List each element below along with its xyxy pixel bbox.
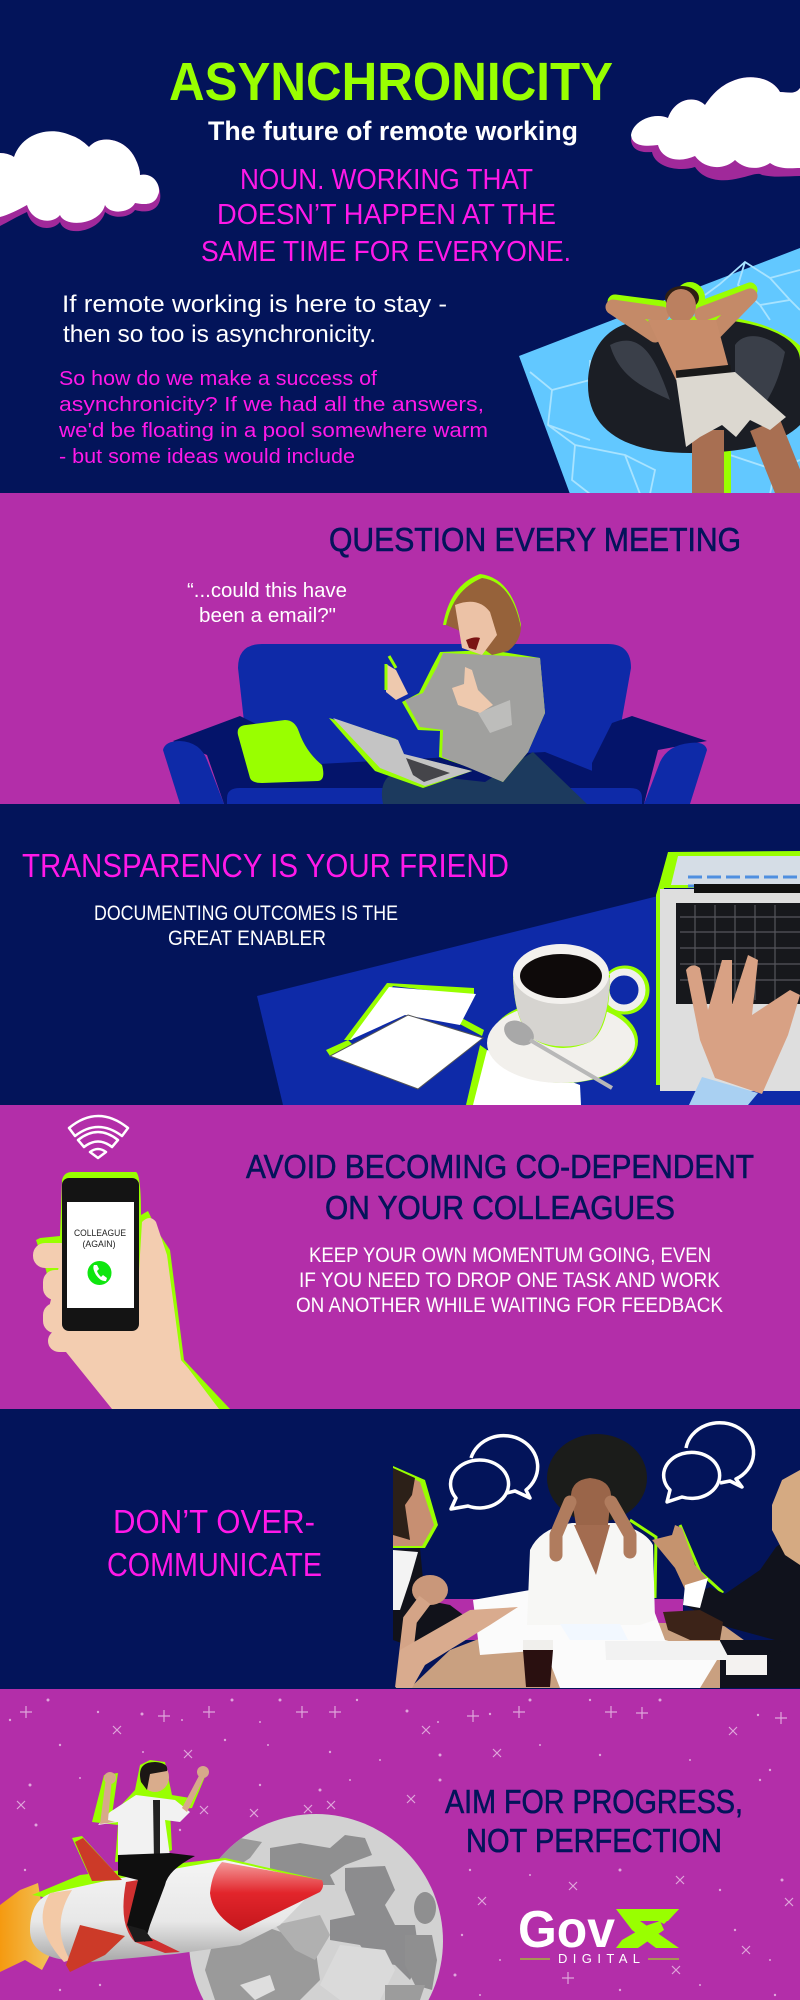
green outline <box>36 1172 230 1409</box>
legs <box>708 425 795 500</box>
panel: transparency <box>0 804 800 1105</box>
table <box>412 1623 744 1688</box>
phone <box>62 1178 139 1331</box>
intro statement: If remote working is here to stay - <box>62 291 447 318</box>
icon: loose papers <box>326 983 581 1105</box>
photo: meeting <box>393 1434 800 1688</box>
man left <box>393 1466 518 1688</box>
torso <box>648 320 730 380</box>
heading: AIM FOR PROGRESS, <box>445 1783 743 1820</box>
quote: “...could this have <box>187 580 347 602</box>
title: ASYNCHRONICITY <box>169 52 613 112</box>
definition text <box>201 164 571 268</box>
laptop <box>329 718 472 788</box>
shirt cuff <box>689 1077 758 1105</box>
heading <box>107 1503 322 1583</box>
panel: avoid becoming co-dependent <box>0 1105 800 1409</box>
rocket green edge <box>32 1858 322 1900</box>
intro question text: we'd be floating in a pool somewhere warm <box>58 420 488 442</box>
logo: GovX Digital: DIGITAL <box>558 1951 640 1966</box>
panel: aim for progress <box>0 1689 800 2000</box>
icon: right speech bubbles <box>664 1423 754 1502</box>
phone screen: (AGAIN) <box>82 1239 116 1249</box>
body text: IF YOU NEED TO DROP ONE TASK AND WORK <box>299 1269 720 1292</box>
icon: wifi <box>69 1116 128 1158</box>
panel: intro <box>0 0 800 500</box>
shorts <box>676 372 786 447</box>
icon: right cloud <box>631 77 800 180</box>
phone screen: COLLEAGUE <box>74 1228 126 1238</box>
intro question text: So how do we make a success of <box>59 368 377 390</box>
woman centre <box>527 1434 655 1625</box>
hand <box>46 1218 219 1409</box>
sweater <box>402 650 545 782</box>
logo: GovX Digital <box>518 1901 679 1966</box>
illustration: sofa <box>163 644 707 804</box>
illustration: moon <box>189 1814 443 2000</box>
heading: AVOID BECOMING CO-DEPENDENT <box>246 1148 754 1185</box>
star field <box>9 1698 793 1996</box>
intro question text: - but some ideas would include <box>59 446 355 468</box>
heading: ON YOUR COLLEAGUES <box>325 1189 675 1226</box>
photo: coffee cup and saucer <box>487 944 645 1088</box>
icon: green cushion <box>238 720 323 783</box>
subheading: DOCUMENTING OUTCOMES IS THE <box>94 902 398 925</box>
panel: don't over-communicate <box>108 1421 800 1688</box>
coffee cup <box>523 1640 553 1687</box>
hand holding phone <box>33 1172 230 1409</box>
photo: woman with laptop <box>329 574 587 804</box>
heading: TRANSPARENCY IS YOUR FRIEND <box>22 847 509 884</box>
tail band <box>43 1890 72 1962</box>
fingers <box>33 1243 84 1352</box>
intro question text: asynchronicity? If we had all the answers, <box>59 394 484 416</box>
hair <box>443 574 521 655</box>
raised thumbs <box>386 664 493 713</box>
heading: NOT PERFECTION <box>466 1822 722 1859</box>
body text: ON ANOTHER WHILE WAITING FOR FEEDBACK <box>296 1294 723 1317</box>
body text: KEEP YOUR OWN MOMENTUM GOING, EVEN <box>309 1244 711 1267</box>
definition text: NOUN. WORKING THAT <box>240 164 533 196</box>
photo: laptop and typing hand <box>656 851 800 1105</box>
icon: left cloud <box>0 131 160 231</box>
nose cone <box>210 1862 323 1931</box>
jeans <box>382 752 587 804</box>
subheading <box>94 902 398 950</box>
panel: question every meeting <box>0 493 800 804</box>
purple backdrop <box>426 1599 683 1640</box>
head <box>665 286 699 323</box>
definition text: SAME TIME FOR EVERYONE. <box>201 236 571 268</box>
arms <box>613 296 750 335</box>
pool background <box>519 248 800 494</box>
intro statement: then so too is asynchronicity. <box>63 321 376 348</box>
quote: been a email?" <box>199 605 336 627</box>
rocket body <box>30 1860 322 1962</box>
subheading: GREAT ENABLER <box>168 927 326 950</box>
document <box>560 1624 628 1640</box>
quote <box>187 580 347 627</box>
logo: GovX Digital: Gov <box>518 1901 615 1959</box>
photo: man floating on inner tube <box>588 282 800 500</box>
rear fins <box>66 1836 125 1972</box>
face <box>455 602 497 655</box>
body text <box>296 1244 723 1317</box>
person <box>92 1760 209 1942</box>
subtitle: The future of remote working <box>208 116 578 146</box>
heading: QUESTION EVERY MEETING <box>329 521 741 558</box>
laptop <box>656 851 800 1091</box>
heading <box>445 1783 743 1859</box>
illustration: man riding rocket <box>0 1760 323 1972</box>
phone screen <box>67 1202 134 1308</box>
hand <box>686 955 800 1094</box>
flame <box>0 1883 50 1972</box>
man right <box>652 1470 800 1688</box>
heading <box>246 1148 754 1226</box>
heading: DON’T OVER- <box>113 1503 315 1540</box>
tube outline <box>594 282 800 494</box>
icon: left speech bubbles <box>451 1436 538 1509</box>
definition text: DOESN’T HAPPEN AT THE <box>217 199 556 231</box>
green edges <box>630 1520 723 1598</box>
body band <box>123 1880 180 1953</box>
heading: COMMUNICATE <box>107 1546 322 1583</box>
blue table shape <box>257 896 800 1105</box>
inner tube <box>588 320 800 453</box>
intro statement <box>62 291 447 348</box>
intro question text <box>58 368 488 468</box>
